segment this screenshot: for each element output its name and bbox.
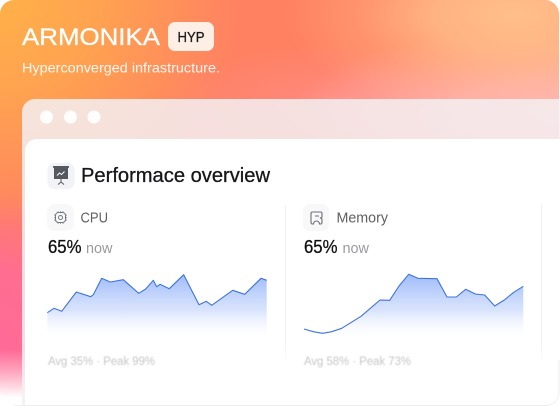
tagline: Hyperconverged infrastructure. (22, 60, 220, 76)
panel: CPU metric (47, 204, 267, 368)
value: 65% now: 65% (48, 237, 82, 257)
panel: Memory metric (303, 204, 523, 368)
value: 65% now: 65% (304, 237, 338, 257)
value: 65% now (304, 237, 369, 257)
value: 65% now (48, 237, 113, 257)
caption: CPU average and peak: Avg 35% · Peak 99% (48, 356, 155, 368)
logo: Armonika wordmark: ARMONIKA (22, 24, 160, 51)
badge: HYP (168, 22, 214, 51)
caption: memory average and peak: Avg 58% · Peak 73% (304, 356, 411, 368)
value: 65% now: now (86, 240, 113, 257)
divider right of memory column (541, 204, 542, 367)
divider between columns (285, 205, 286, 367)
value: 65% now: now (342, 240, 369, 257)
icon: presentation board (48, 163, 74, 189)
label: Memory: Memory (336, 210, 389, 226)
logo and tagline header (22, 22, 220, 76)
heading: Performace overview: Performace overview (81, 165, 271, 187)
badge: HYP: HYP (178, 30, 204, 46)
panel: performance overview card (14, 139, 560, 406)
browser window frame (22, 99, 560, 405)
area chart: memory usage (304, 274, 523, 340)
label: CPU: CPU (80, 210, 108, 226)
icon: memory (303, 204, 329, 231)
icon: CPU chip (47, 204, 74, 231)
area chart: CPU usage (47, 275, 267, 340)
window control dots (40, 110, 100, 124)
